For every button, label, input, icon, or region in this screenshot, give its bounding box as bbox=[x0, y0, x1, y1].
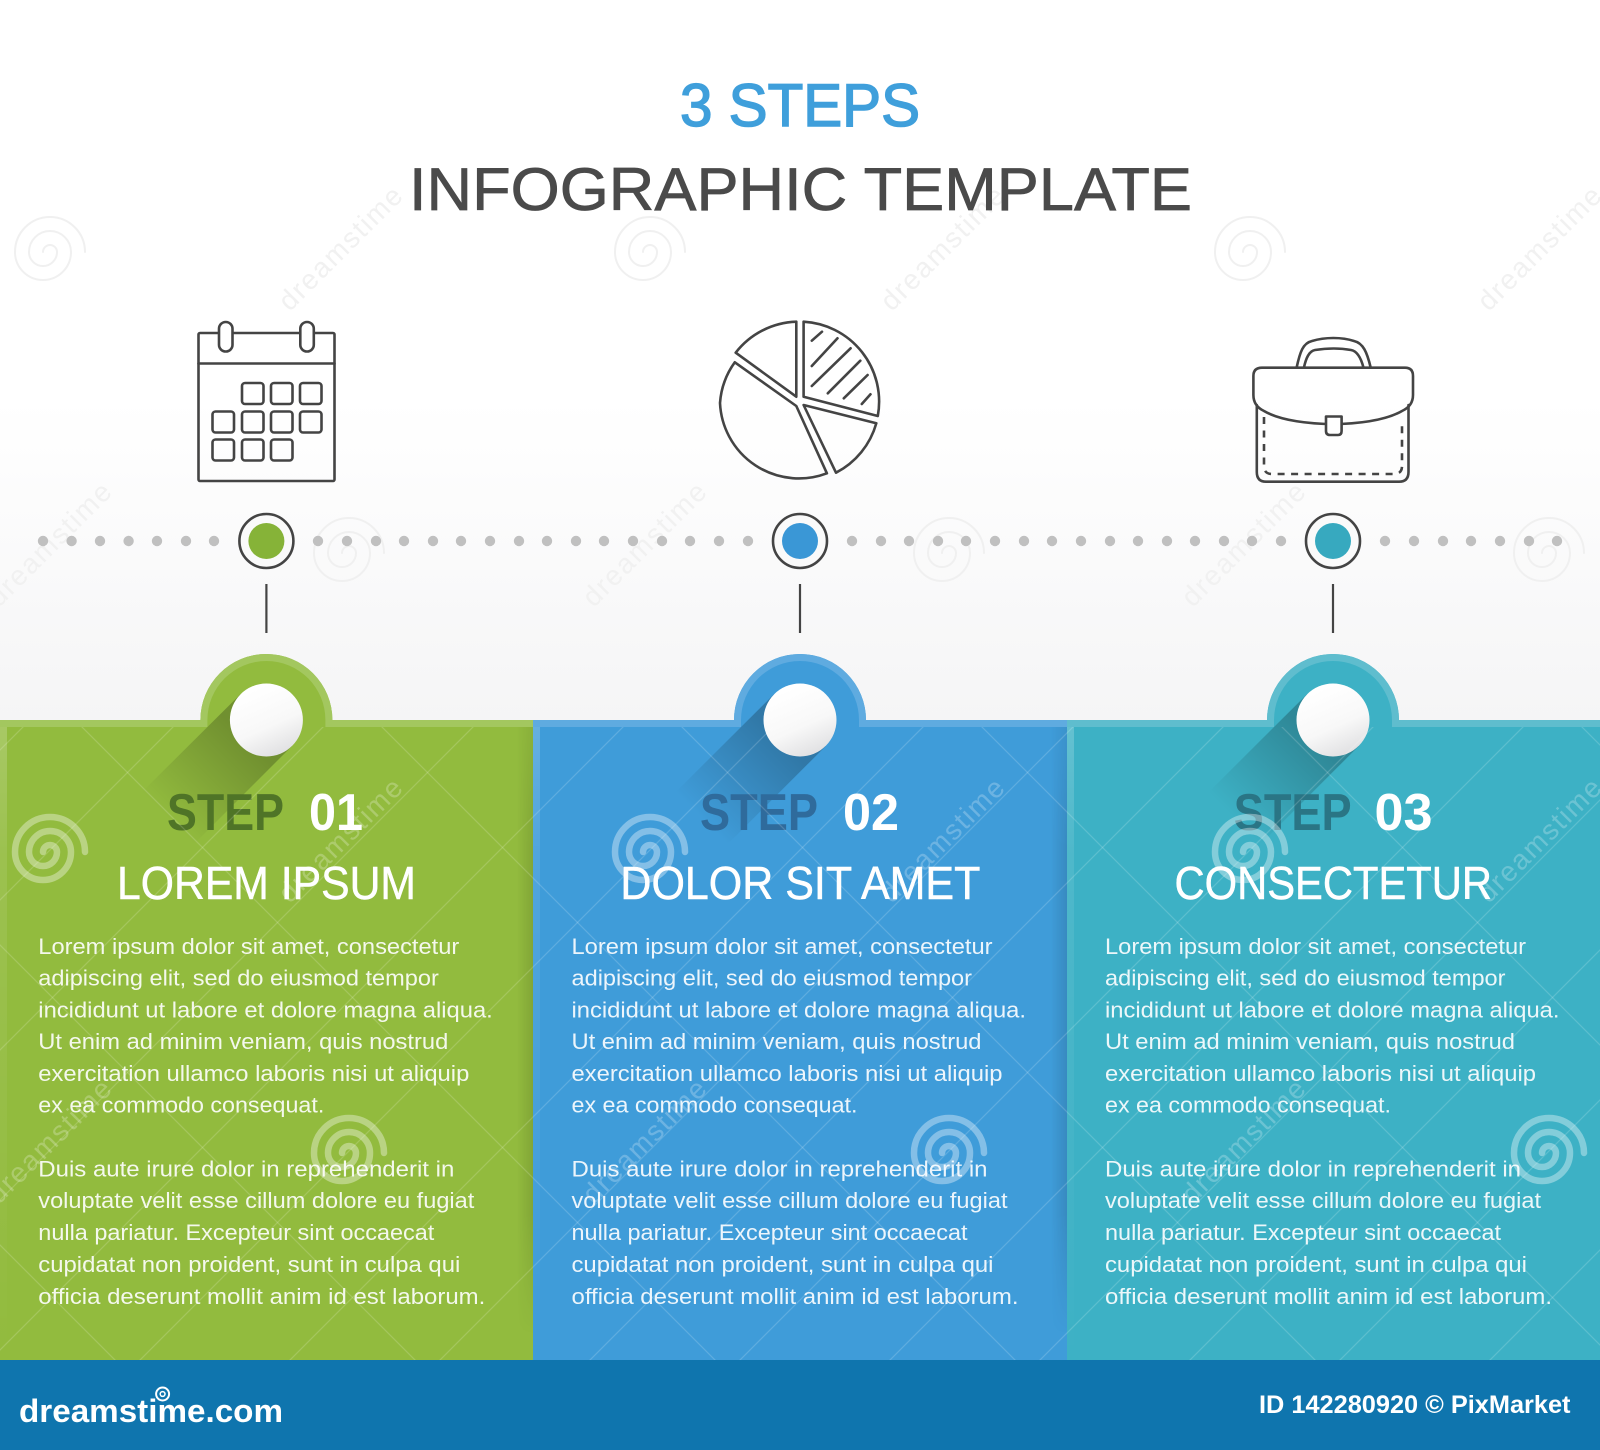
body text 3: officia deserunt mollit anim id est laborum. bbox=[1105, 1284, 1552, 1309]
body text 3: Lorem ipsum dolor sit amet, consectetur bbox=[1105, 934, 1527, 959]
ball 3 bbox=[1296, 684, 1370, 756]
body text 1: Ut enim ad minim veniam, quis nostrud bbox=[38, 1029, 448, 1054]
text: dreamstime bbox=[874, 180, 1011, 317]
panel: step 01 bbox=[0, 654, 533, 1360]
body text 1: Lorem ipsum dolor sit amet, consectetur bbox=[38, 934, 460, 959]
body text 1: ex ea commodo consequat. bbox=[38, 1092, 324, 1118]
body text 2: adipiscing elit, sed do eiusmod tempor bbox=[572, 966, 973, 991]
text: dreamstime bbox=[576, 1073, 713, 1210]
body text 3: incididunt ut labore et dolore magna aliqua. bbox=[1105, 997, 1560, 1022]
text: dreamstime bbox=[272, 180, 409, 317]
body text 2: Lorem ipsum dolor sit amet, consectetur bbox=[572, 934, 993, 959]
body text 2: Duis aute irure dolor in reprehenderit in bbox=[572, 1156, 988, 1182]
footer bar bbox=[0, 1360, 1600, 1450]
icon: briefcase bbox=[1253, 338, 1413, 482]
step label 01: STEP bbox=[167, 784, 284, 842]
dotted timeline bbox=[38, 536, 1562, 546]
panel: step 03 bbox=[1067, 654, 1600, 1360]
title line 1: 3 STEPS bbox=[680, 72, 920, 139]
body text 3: Duis aute irure dolor in reprehenderit in bbox=[1105, 1156, 1521, 1182]
timeline marker 2 bbox=[773, 514, 827, 633]
step label 02: STEP bbox=[700, 784, 818, 842]
text: dreamstime bbox=[576, 476, 713, 613]
icon: pie chart bbox=[720, 322, 879, 478]
body text 1: Duis aute irure dolor in reprehenderit in bbox=[38, 1156, 454, 1182]
title line 2: INFOGRAPHIC TEMPLATE bbox=[409, 156, 1192, 223]
ball 1 bbox=[230, 684, 303, 756]
step label 03: STEP bbox=[1234, 784, 1352, 842]
footer credit: ID 142280920 © PixMarket bbox=[1259, 1391, 1571, 1419]
body text 2: voluptate velit esse cillum dolore eu fugiat bbox=[572, 1188, 1008, 1213]
step label 03: 03 bbox=[1374, 784, 1432, 842]
body text 1: adipiscing elit, sed do eiusmod tempor bbox=[38, 966, 439, 991]
body text 1: incididunt ut labore et dolore magna aliqua. bbox=[38, 997, 493, 1022]
body text 3: ex ea commodo consequat. bbox=[1105, 1092, 1391, 1118]
body text 2: officia deserunt mollit anim id est laborum. bbox=[572, 1284, 1018, 1309]
step label 01 bbox=[167, 784, 363, 842]
body text 2: incididunt ut labore et dolore magna aliqua. bbox=[572, 997, 1026, 1022]
body text 3: nulla pariatur. Excepteur sint occaecat bbox=[1105, 1220, 1502, 1245]
step label 02 bbox=[700, 784, 899, 842]
title bbox=[409, 72, 1192, 223]
footer logo: dreamstime.com bbox=[19, 1393, 283, 1429]
text: dreamstime bbox=[874, 772, 1011, 909]
body text 3: voluptate velit esse cillum dolore eu fugiat bbox=[1105, 1188, 1542, 1213]
text: dreamstime bbox=[1175, 1073, 1312, 1210]
icon: calendar bbox=[198, 322, 334, 481]
body text 2: exercitation ullamco laboris nisi ut aliquip bbox=[572, 1061, 1002, 1086]
body text 1: voluptate velit esse cillum dolore eu fugiat bbox=[38, 1188, 475, 1213]
body text 1: cupidatat non proident, sunt in culpa qui bbox=[38, 1252, 460, 1277]
body text 3: adipiscing elit, sed do eiusmod tempor bbox=[1105, 966, 1506, 991]
heading: Dolor sit amet: DOLOR SIT AMET bbox=[620, 857, 980, 909]
heading: Lorem ipsum: LOREM IPSUM bbox=[117, 857, 416, 909]
body text 3: exercitation ullamco laboris nisi ut aliquip bbox=[1105, 1061, 1536, 1086]
body text 2: Ut enim ad minim veniam, quis nostrud bbox=[572, 1029, 982, 1054]
step label 01: 01 bbox=[309, 784, 363, 842]
body text 2: nulla pariatur. Excepteur sint occaecat bbox=[572, 1220, 968, 1245]
body text 2: ex ea commodo consequat. bbox=[572, 1092, 858, 1118]
text: dreamstime bbox=[272, 772, 409, 909]
body text 1: exercitation ullamco laboris nisi ut aliquip bbox=[38, 1061, 469, 1086]
body text 3 bbox=[1105, 934, 1560, 1309]
body text 3: Ut enim ad minim veniam, quis nostrud bbox=[1105, 1029, 1515, 1054]
body text 1 bbox=[38, 934, 493, 1309]
timeline marker 3 bbox=[1306, 514, 1360, 633]
body text 1: nulla pariatur. Excepteur sint occaecat bbox=[38, 1220, 435, 1245]
heading: Consectetur: CONSECTETUR bbox=[1174, 857, 1492, 909]
body text 2: cupidatat non proident, sunt in culpa qui bbox=[572, 1252, 994, 1277]
ball 2 bbox=[764, 684, 836, 756]
text: dreamstime bbox=[1175, 476, 1312, 613]
step label 03 bbox=[1234, 784, 1432, 842]
panel: step 02 bbox=[533, 654, 1067, 1360]
body text 1: officia deserunt mollit anim id est laborum. bbox=[38, 1284, 485, 1309]
body text 2 bbox=[572, 934, 1026, 1309]
body text 3: cupidatat non proident, sunt in culpa qui bbox=[1105, 1252, 1527, 1277]
timeline marker 1 bbox=[239, 514, 293, 633]
step label 02: 02 bbox=[843, 784, 899, 842]
